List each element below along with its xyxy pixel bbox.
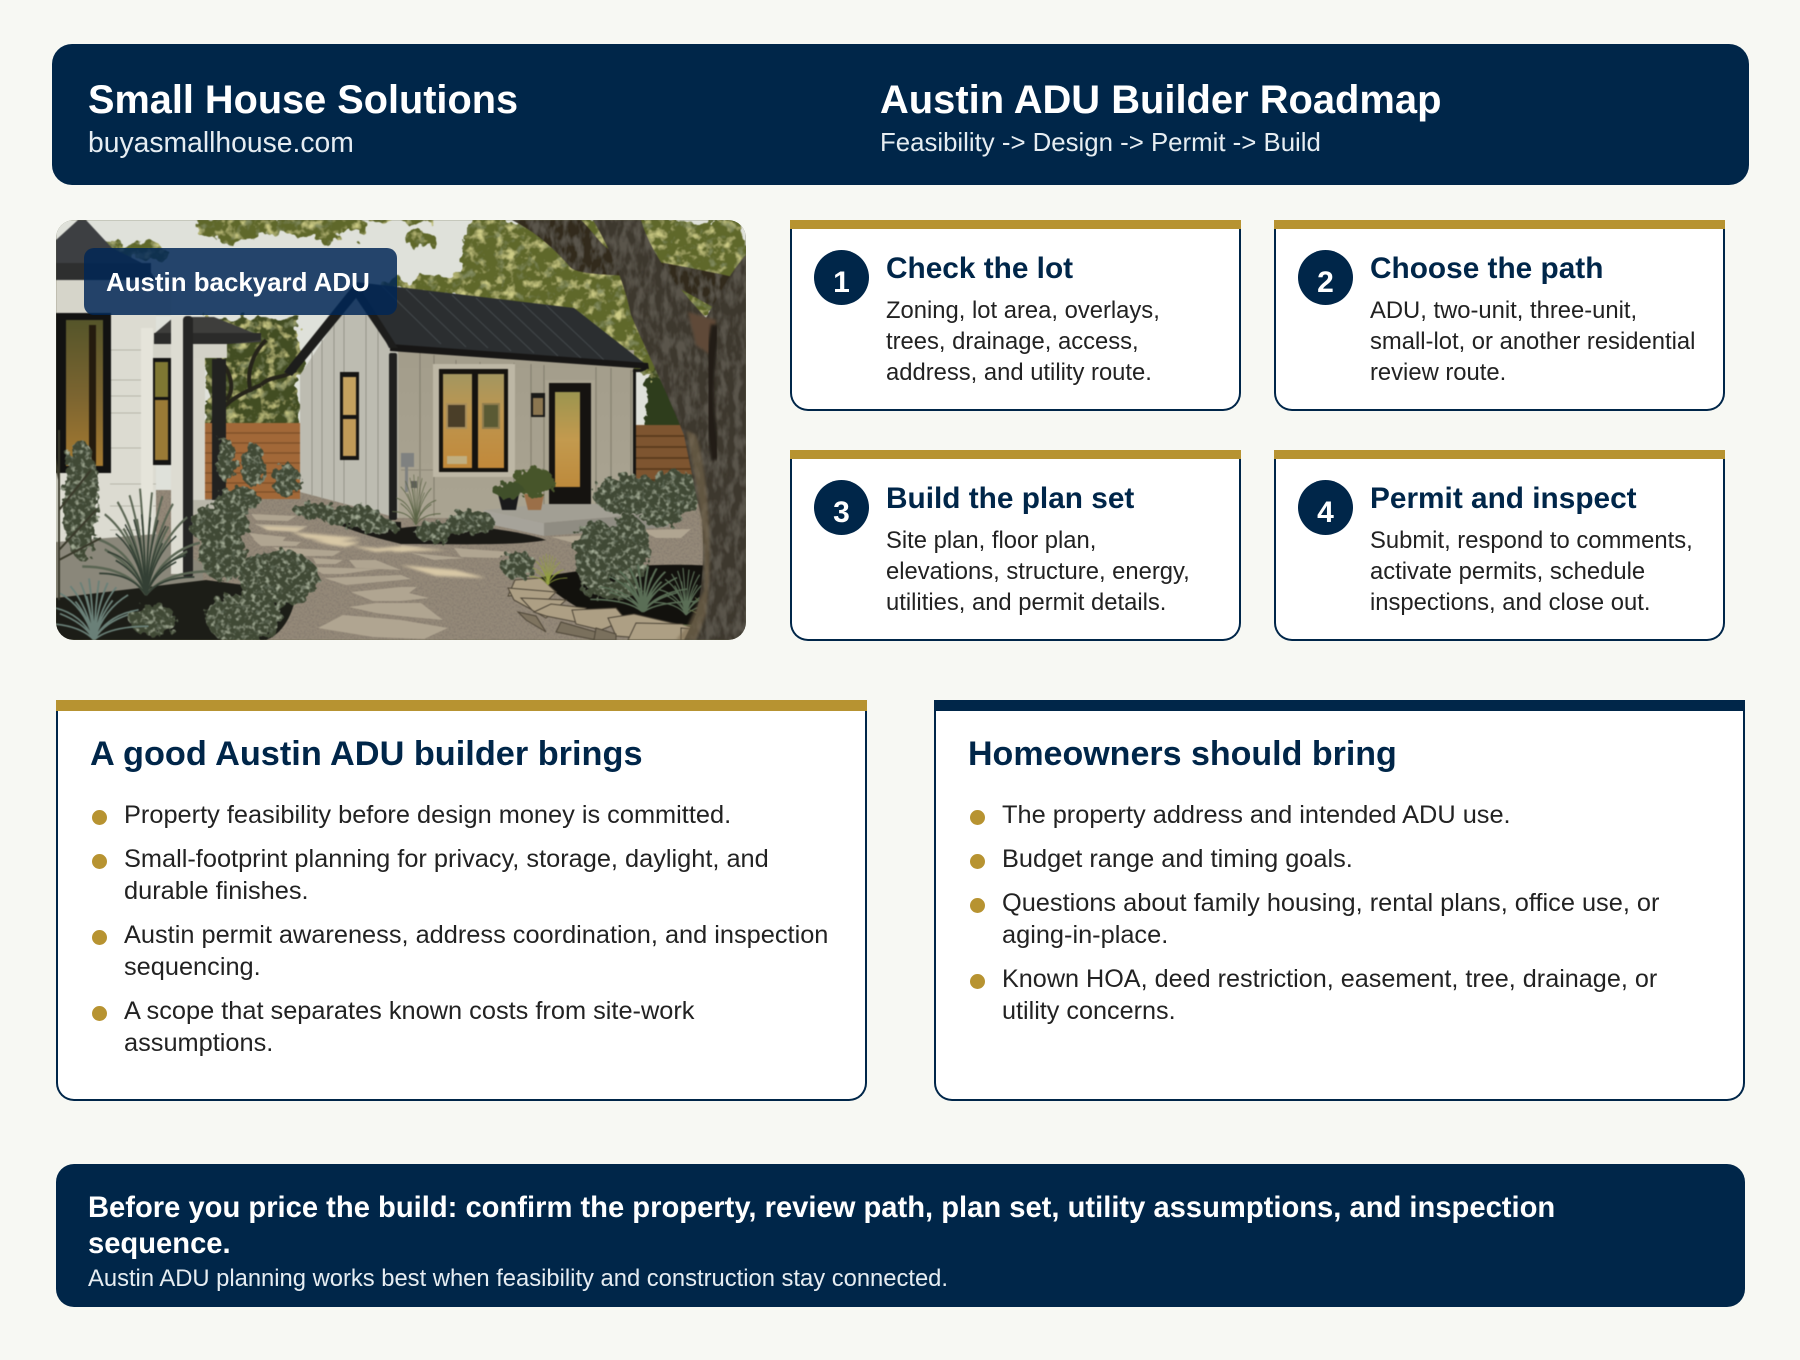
step 3 text: utilities, and permit details. — [886, 589, 1166, 616]
wall lantern — [531, 393, 545, 417]
header band — [52, 44, 1749, 185]
step 3 text — [886, 527, 1190, 616]
brand name: Small House Solutions — [88, 78, 518, 122]
concrete porch — [484, 504, 669, 536]
front window — [433, 364, 515, 477]
step 1 text — [886, 297, 1160, 386]
step 2 text: review route. — [1370, 359, 1506, 386]
utility box — [401, 453, 417, 492]
step number 2 — [1298, 250, 1353, 305]
callout headline — [88, 1192, 1555, 1260]
builder bullet list — [92, 801, 828, 1057]
wood fence — [202, 423, 700, 499]
step number 2: 2 — [1317, 266, 1334, 299]
builder bullet list: assumptions. — [124, 1029, 273, 1057]
step number 3: 3 — [833, 496, 850, 529]
step 1 text: Zoning, lot area, overlays, — [886, 297, 1160, 324]
step 4 text — [1370, 527, 1693, 616]
homeowner bullet list: Known HOA, deed restriction, easement, tree, drainage, or — [1002, 965, 1657, 993]
potted plants — [492, 468, 555, 510]
front door — [545, 380, 595, 506]
builder bullet list: Austin permit awareness, address coordination, and inspection — [124, 921, 828, 949]
callout: before you price — [56, 1164, 1745, 1307]
photo: Austin backyard ADU — [56, 220, 746, 640]
brand website: buyasmallhouse.com — [88, 126, 354, 158]
callout subtext: Austin ADU planning works best when feasibility and construction stay connected. — [88, 1265, 948, 1292]
tree canopy — [100, 210, 746, 430]
homeowner bullet list — [970, 801, 1659, 1025]
step 3 text: Site plan, floor plan, — [886, 527, 1096, 554]
stone border — [508, 578, 736, 640]
step 2 text: small-lot, or another residential — [1370, 328, 1695, 355]
oak tree — [512, 220, 746, 640]
main house — [56, 220, 261, 602]
step 1 text: address, and utility route. — [886, 359, 1152, 386]
step number 3 — [814, 480, 869, 535]
step card 1 — [790, 220, 1241, 411]
step 1 text: trees, drainage, access, — [886, 328, 1139, 355]
step 4 text: Submit, respond to comments, — [1370, 527, 1693, 554]
caption text: Austin backyard ADU — [106, 269, 370, 297]
step number 1 — [814, 250, 869, 305]
callout headline: Before you price the build: confirm the property, review path, plan set, utility assumptions, and inspection — [88, 1192, 1555, 1224]
builder panel heading: A good Austin ADU builder brings — [90, 735, 643, 773]
homeowner bullet list: utility concerns. — [1002, 997, 1176, 1025]
left wall window — [340, 372, 359, 460]
step 4 heading: Permit and inspect — [1370, 482, 1637, 515]
builder bullet list: sequencing. — [124, 953, 261, 981]
step card 2 — [1274, 220, 1725, 411]
stepping stones — [249, 514, 691, 639]
step 2 heading: Choose the path — [1370, 252, 1603, 285]
sky — [56, 220, 746, 640]
large window — [56, 313, 111, 473]
panel: homeowners bring — [934, 700, 1745, 1101]
step 2 text: ADU, two-unit, three-unit, — [1370, 297, 1637, 324]
metal roof — [284, 282, 649, 376]
step number 4 — [1298, 480, 1353, 535]
side window — [153, 357, 171, 465]
step card 3 — [790, 450, 1241, 641]
step number 1: 1 — [833, 266, 850, 299]
builder bullet list: Property feasibility before design money is committed. — [124, 801, 731, 829]
step 1 heading: Check the lot — [886, 252, 1073, 285]
step number 4: 4 — [1317, 496, 1334, 529]
step 4 text: inspections, and close out. — [1370, 589, 1650, 616]
homeowner bullet list: aging-in-place. — [1002, 921, 1168, 949]
sunlight on path — [261, 526, 486, 578]
homeowner bullet list: The property address and intended ADU use. — [1002, 801, 1511, 829]
step 3 text: elevations, structure, energy, — [886, 558, 1190, 585]
builder bullet list: Small-footprint planning for privacy, storage, daylight, and — [124, 845, 769, 873]
step 2 text — [1370, 297, 1695, 386]
gravel ground — [56, 490, 746, 640]
builder bullet list: A scope that separates known costs from site-work — [124, 997, 694, 1025]
garden beds — [56, 518, 746, 640]
photo caption tag — [84, 248, 397, 315]
homeowner bullet list: Questions about family housing, rental plans, office use, or — [1002, 889, 1659, 917]
shrubs and grasses — [41, 430, 749, 644]
panel: builder brings — [56, 700, 867, 1101]
homeowner bullet list: Budget range and timing goals. — [1002, 845, 1353, 873]
ADU cottage — [284, 282, 669, 536]
roadmap stages: Feasibility -> Design -> Permit -> Build — [880, 129, 1321, 157]
step 4 text: activate permits, schedule — [1370, 558, 1645, 585]
builder bullet list: durable finishes. — [124, 877, 309, 905]
step card 4 — [1274, 450, 1725, 641]
homeowner panel heading: Homeowners should bring — [968, 735, 1397, 773]
roadmap title: Austin ADU Builder Roadmap — [880, 78, 1441, 122]
callout headline: sequence. — [88, 1228, 231, 1260]
step 3 heading: Build the plan set — [886, 482, 1134, 515]
